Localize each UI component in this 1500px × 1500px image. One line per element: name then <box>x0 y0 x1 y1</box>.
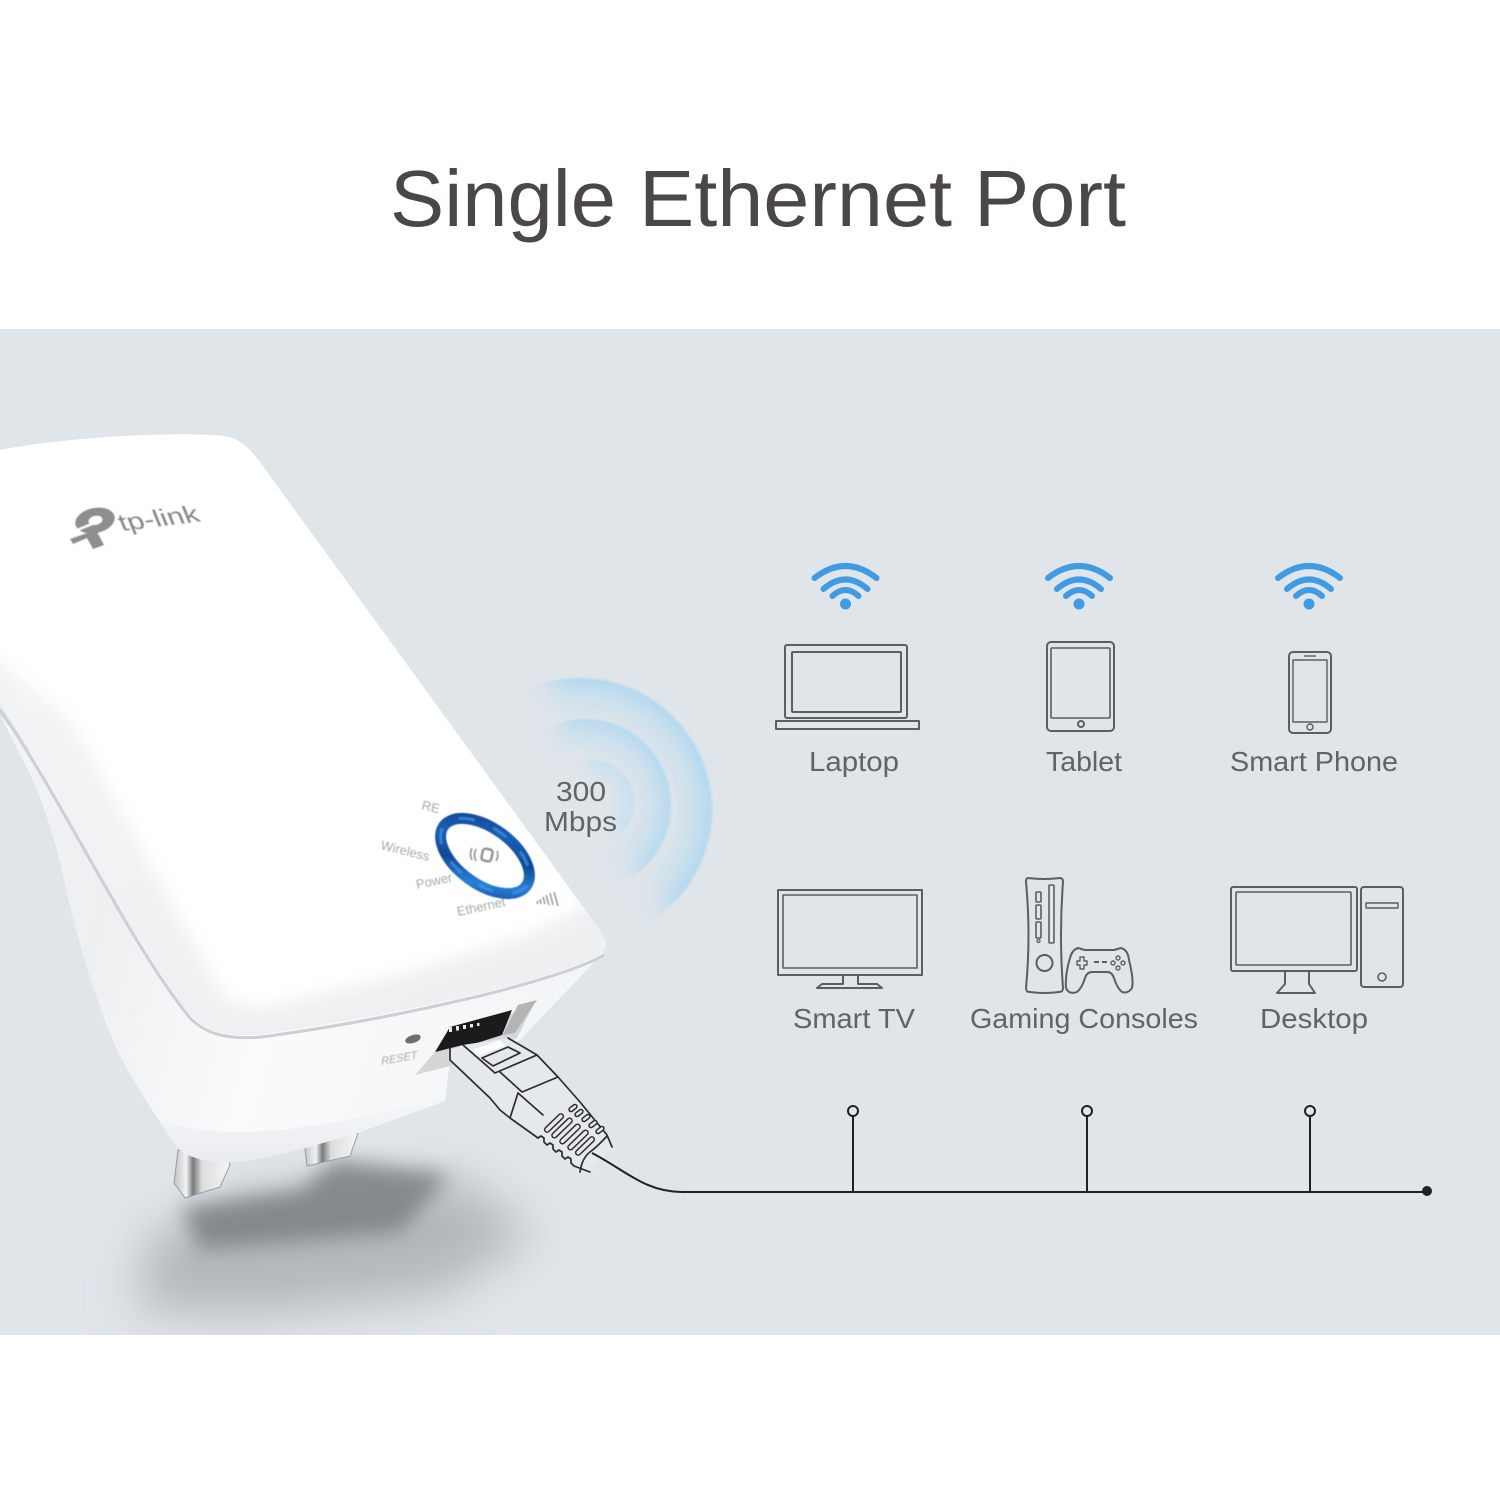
WPS icon <box>470 848 498 862</box>
body lower foot <box>160 1096 446 1162</box>
network cable line <box>592 1116 1426 1192</box>
icon: smart tv <box>778 890 922 988</box>
LED ring <box>427 803 543 909</box>
cable node: second drop <box>1082 1106 1092 1116</box>
speed label <box>544 776 617 837</box>
cable node: first drop <box>848 1106 858 1116</box>
status labels: Wireless <box>379 837 432 864</box>
cover highlight <box>0 415 590 1008</box>
logo: tp-link <box>70 501 205 549</box>
inner wave <box>586 759 634 834</box>
icon: desktop computer <box>1231 887 1403 993</box>
status labels <box>379 797 507 919</box>
reset label: RESET <box>381 1049 418 1068</box>
cover edge line <box>0 710 604 1038</box>
signal bars <box>537 892 558 906</box>
status labels: Ethernet <box>456 894 507 919</box>
title: Ethernet <box>639 154 952 243</box>
ethernet port <box>415 1000 537 1075</box>
icon: wifi over phone <box>1278 566 1340 610</box>
label: desktop: Desktop <box>1260 1003 1368 1034</box>
ethernet connector <box>450 1038 612 1172</box>
label: smart tv: Smart TV <box>793 1003 915 1034</box>
logo mark <box>70 504 117 549</box>
panel: background <box>0 329 1500 1335</box>
front cover <box>0 415 606 1035</box>
icon: tablet <box>1047 642 1114 731</box>
device shadow on floor <box>135 1160 535 1315</box>
icon: smart phone <box>1289 652 1331 733</box>
icon: wifi over laptop <box>814 566 876 610</box>
title: Port <box>974 154 1126 243</box>
plug prongs <box>174 1133 358 1198</box>
label: tablet: Tablet <box>1046 746 1122 777</box>
outer and middle waves <box>542 677 713 914</box>
title: Single <box>390 154 616 243</box>
icon: gaming console and controller <box>1026 878 1133 993</box>
logo wordmark: tp-link <box>114 501 205 537</box>
icon: laptop <box>776 645 919 729</box>
label: laptop: Laptop <box>809 746 899 777</box>
label: gaming consoles: Gaming Consoles <box>970 1003 1198 1034</box>
cable node: third drop <box>1305 1106 1315 1116</box>
range extender device <box>0 415 606 1198</box>
label: smart phone: Smart Phone <box>1230 746 1398 777</box>
rear body <box>0 715 604 1162</box>
status labels: RE <box>420 797 442 816</box>
status labels: Power <box>415 869 454 892</box>
cable end dot <box>1422 1186 1432 1196</box>
title <box>390 154 1126 243</box>
reset pinhole <box>404 1033 422 1045</box>
boot ribs <box>544 1104 605 1156</box>
wireless signal waves <box>542 677 713 914</box>
icon: wifi over tablet <box>1048 566 1110 610</box>
speed label: Mbps <box>544 806 617 837</box>
speed label: 300 <box>556 776 606 807</box>
